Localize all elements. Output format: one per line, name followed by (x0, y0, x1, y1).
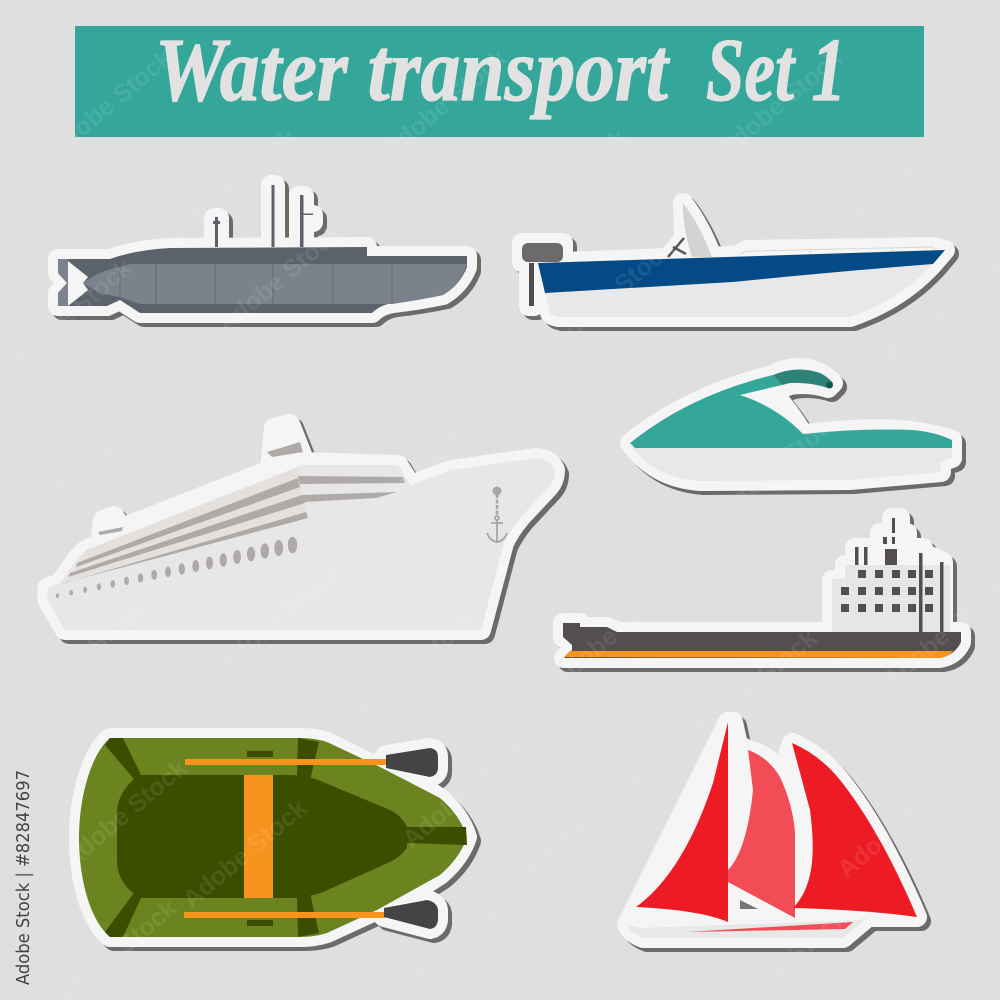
watermark: Adobe Stock (167, 124, 302, 244)
sticker: motor boat (522, 203, 949, 321)
watermark: Adobe Stock (687, 624, 822, 744)
stock id label: Adobe Stock | #82847697 (13, 770, 34, 985)
watermark: Adobe Stock (712, 404, 847, 524)
sticker: cargo ship (563, 518, 965, 662)
watermark: Adobe Stock (712, 44, 847, 164)
watermark: Adobe Stock (377, 44, 512, 164)
watermark: Adobe Stock (57, 754, 192, 874)
watermark: Adobe Stock (832, 124, 967, 244)
sticker: sailboat (627, 722, 921, 942)
watermark: Adobe Stock (497, 124, 632, 244)
title banner: Water transport (155, 21, 671, 120)
watermark: Adobe Stock (517, 764, 652, 884)
sticker: jet ski (630, 368, 956, 485)
watermark: Adobe Stock (47, 384, 182, 504)
watermark: Adobe Stock (17, 594, 152, 714)
watermark: Adobe Stock (377, 389, 512, 509)
sticker: submarine (58, 185, 471, 317)
watermark: Adobe Stock (544, 234, 679, 354)
title banner: Set 1 (706, 21, 846, 120)
tower and masts (855, 518, 944, 632)
windows (841, 570, 933, 612)
sticker: cruise ship (48, 424, 559, 634)
deck stripes (60, 468, 405, 584)
icon: anchor (487, 486, 507, 542)
title banner (75, 21, 924, 137)
sticker: inflatable raft (79, 738, 471, 941)
raft floor and seams (105, 738, 467, 937)
watermark: Adobe Stock (545, 574, 680, 694)
watermark: Adobe Stock (347, 604, 482, 724)
watermark: Adobe Stock (212, 559, 347, 679)
watermark: Adobe Stock (177, 794, 312, 914)
watermark: Adobe Stock (212, 219, 347, 339)
portholes (56, 537, 297, 598)
seat (244, 775, 273, 898)
watermark: Adobe Stock (42, 44, 177, 164)
watermark: Adobe Stock (2, 254, 137, 374)
watermark: Adobe Stock (832, 764, 967, 884)
watermark: Adobe Stock (397, 734, 532, 854)
oars (184, 748, 438, 929)
